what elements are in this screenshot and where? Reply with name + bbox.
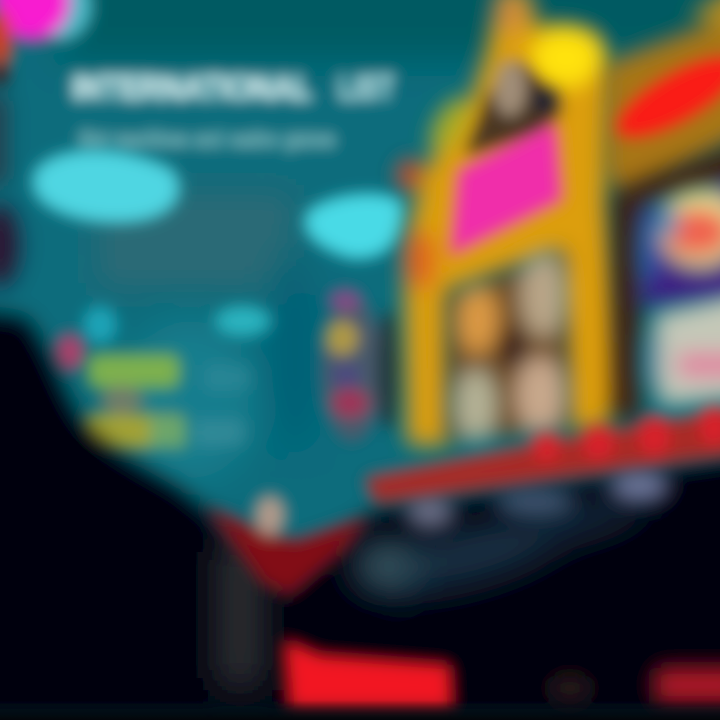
right machine top panel	[605, 0, 720, 198]
slot machine dark top window	[465, 60, 562, 155]
title: LIST	[338, 69, 394, 107]
right machine lower display	[645, 290, 720, 405]
cyan oval callout right	[305, 194, 402, 258]
red chevron shape	[205, 495, 370, 595]
red marquee lights strip	[365, 405, 720, 502]
reels	[448, 250, 570, 441]
console navy glow	[366, 486, 652, 608]
red bar bottom right	[548, 668, 720, 702]
slot machine main frame	[398, 0, 624, 445]
legend rows	[56, 334, 250, 448]
title: INTERNATIONAL	[72, 69, 312, 107]
pink screen	[450, 122, 562, 256]
marquee underside highlights	[406, 470, 670, 528]
red bar bottom left	[285, 640, 452, 708]
red oval on top panel	[605, 41, 720, 153]
dark lower console and silhouette base	[0, 310, 720, 720]
soft grey edge beside silhouette	[215, 540, 265, 690]
corner graphic: pink balloon	[0, 0, 92, 86]
console teal patch	[353, 541, 417, 589]
slot machine left column lights	[322, 290, 400, 442]
dark gap between machines	[612, 135, 720, 420]
small cyan ovals	[83, 306, 271, 344]
left edge dark strip	[0, 95, 20, 287]
cyan oval callout left	[33, 150, 179, 223]
yellow crest	[530, 28, 602, 88]
right machine display	[638, 170, 720, 305]
bottom edge shade	[0, 700, 720, 720]
subtitle: Slot machines and casino games	[78, 126, 336, 153]
